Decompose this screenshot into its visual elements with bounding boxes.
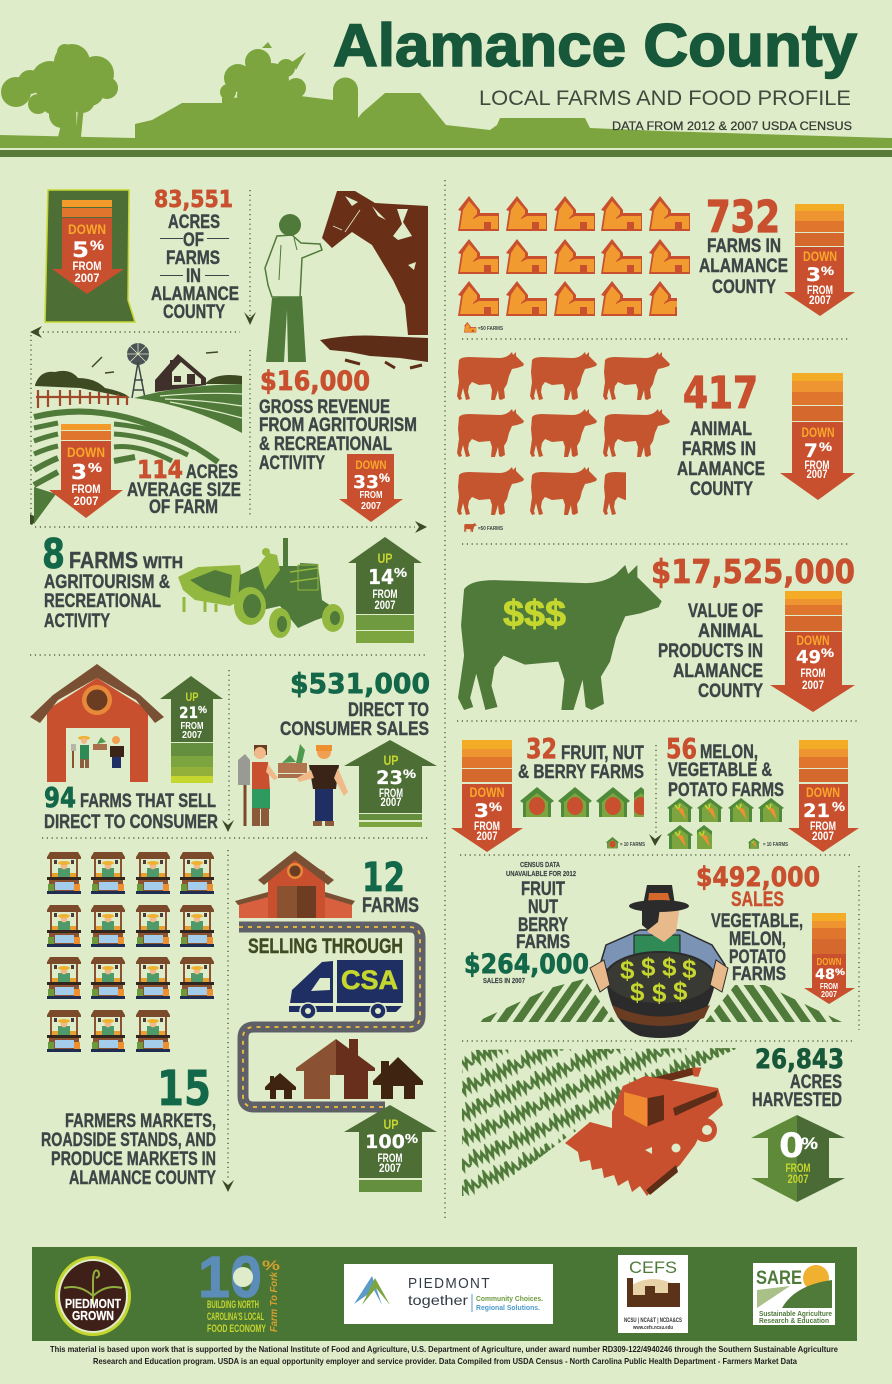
down arrow 3%: [451, 740, 523, 852]
panel: vegetable sales: VEGETABLE,: [711, 911, 803, 932]
logo: 10% campaign: [198, 1245, 281, 1335]
panel: 417 animal farms: [457, 352, 855, 532]
panel: value of animal products: [458, 552, 855, 712]
logo: Piedmont Together: together: [408, 1292, 468, 1308]
panel: direct to consumer sales: DIRECT TO: [348, 700, 429, 721]
down arrow 49%: 49: [796, 647, 821, 668]
down arrow 3%: 2007: [74, 496, 98, 508]
label: & BERRY FARMS: [518, 762, 644, 783]
average size label: [127, 455, 241, 518]
down arrow 7%: [780, 373, 855, 500]
logo: CEFS: CEFS: [629, 1258, 677, 1277]
up arrow 23%: FROM: [379, 788, 403, 800]
markets label: FARMERS MARKETS,: [65, 1111, 216, 1132]
legend: strawberry equals 10 farms: [606, 837, 646, 848]
panel: direct to consumer sales: CONSUMER SALES: [280, 719, 429, 740]
up arrow 14%: %: [394, 565, 407, 580]
icon: farmer and customer with produce crate: [238, 744, 348, 826]
up arrow 23%: %: [403, 767, 416, 781]
panel: vegetable sales: [696, 862, 855, 1004]
panel: fruit sales: CENSUS DATA: [520, 862, 560, 869]
label: ACRES: [790, 1072, 842, 1093]
legend: barn equals 50 farms: [464, 322, 504, 332]
logo: 10% campaign: BUILDING NORTH: [207, 1299, 259, 1311]
panel: farmers markets: [41, 852, 216, 1189]
logo: SARE: SARE: [756, 1268, 802, 1289]
panel: direct to consumer sales: [238, 667, 437, 827]
down arrow 3%: [49, 424, 123, 518]
down arrow 3%: 2007: [809, 295, 831, 307]
markets label: ROADSIDE STANDS, AND: [41, 1130, 216, 1151]
label: HARVESTED: [752, 1090, 842, 1111]
label: COUNTY: [690, 479, 753, 500]
panel: fruit sales: FARMS: [516, 932, 570, 953]
logo: 10% campaign: %: [262, 1257, 281, 1273]
panel: gross revenue from agritourism: GROSS REVENUE: [259, 397, 390, 418]
carrot house icons: [667, 798, 784, 849]
down arrow 48%: FROM: [820, 981, 838, 991]
dotted flow lines and arrowheads: [30, 180, 859, 1218]
label: VALUE OF: [688, 601, 763, 622]
up arrow 100%: 100: [365, 1131, 405, 1153]
data source line: DATA FROM 2012 & 2007 USDA CENSUS: [612, 119, 852, 133]
acres label: OF: [183, 230, 204, 251]
logo: Piedmont Grown: [55, 1256, 131, 1336]
logo: 10% campaign: Farm To Fork: [269, 1272, 280, 1332]
double arrow 0%: %: [801, 1134, 818, 1153]
legend: cow equals 50 farms: =50 FARMS: [478, 526, 504, 532]
up arrow 23%: 23: [376, 767, 403, 789]
label: [518, 732, 644, 783]
up arrow 14%: UP: [378, 550, 392, 566]
farmer: [600, 885, 725, 972]
logo: 10% campaign: CAROLINA'S LOCAL: [207, 1311, 264, 1323]
double arrow 0%: 2007: [788, 1174, 808, 1186]
logo: Piedmont Together: PIEDMONT: [408, 1275, 491, 1292]
up arrow 21%: 2007: [182, 730, 202, 741]
up arrow 100%: FROM: [378, 1153, 402, 1165]
panel: fruit sales: [464, 862, 589, 985]
acres label: COUNTY: [163, 302, 225, 323]
label: ALAMANCE: [673, 661, 763, 682]
label: FARMS IN: [682, 439, 756, 460]
down arrow 21%: [788, 740, 859, 852]
barn icon grid: [458, 196, 690, 316]
down arrow 33%: 2007: [361, 501, 381, 512]
label: FRUIT, NUT: [561, 743, 644, 764]
panel: CSA farms: FARMS: [362, 894, 419, 917]
panel: vegetable sales: FARMS: [732, 964, 786, 985]
up arrow 23%: 2007: [380, 797, 402, 809]
label: 32: [526, 732, 557, 765]
skyline: trees and farm silhouette: [0, 42, 892, 157]
down arrow 5%: 5: [72, 238, 89, 262]
up arrow 14%: 14: [368, 565, 394, 589]
label: [699, 192, 788, 298]
average size label: OF FARM: [149, 497, 218, 518]
down arrow 48%: [804, 913, 855, 1004]
panel: farms with agritourism: [42, 530, 422, 643]
panel: fruit sales: SALES IN 2007: [483, 978, 525, 985]
down arrow 48%: DOWN: [816, 957, 842, 968]
down arrow 33%: 33: [353, 472, 379, 493]
panel: CSA farms: SELLING THROUGH: [248, 935, 403, 958]
up arrow 23%: UP: [384, 752, 398, 768]
down arrow 48%: 2007: [821, 989, 837, 999]
bowl of money: $: [620, 955, 635, 985]
down arrow 21%: DOWN: [806, 784, 840, 800]
down arrow 5%: %: [90, 237, 105, 253]
panel: gross revenue from agritourism: FROM AGRITOURISM: [259, 415, 417, 436]
subtitle: LOCAL FARMS AND FOOD PROFILE: [479, 87, 851, 110]
down arrow 49%: [770, 591, 855, 712]
label: 56: [666, 732, 697, 765]
icon: CSA truck: [289, 960, 403, 1019]
panel: fruit sales: $264,000: [464, 949, 589, 980]
up arrow 100%: [344, 1105, 437, 1192]
label: 94: [44, 781, 76, 814]
icon: houses: [265, 1039, 423, 1099]
down arrow 3%: DOWN: [470, 784, 504, 800]
label: [677, 368, 765, 500]
acres figure: 83,551: [154, 187, 233, 213]
icon: large green cow with dollar signs: $$$: [503, 593, 566, 634]
icon: barn: [235, 851, 355, 918]
down arrow 49%: %: [821, 646, 834, 660]
panel: gross revenue from agritourism: [259, 366, 417, 522]
up arrow 14%: FROM: [372, 589, 398, 601]
panel: farms that sell direct to consumer: [30, 664, 223, 833]
panel: melon vegetable potato farms: [666, 732, 859, 852]
up arrow 100%: %: [405, 1131, 418, 1146]
label: MELON,: [700, 742, 758, 763]
logo: Piedmont Together: Community Choices.: [476, 1294, 543, 1303]
up arrow 23%: [344, 740, 437, 827]
down arrow 21%: FROM: [810, 821, 836, 833]
logo: 10% campaign: 10: [198, 1245, 262, 1310]
down arrow 33%: [339, 454, 403, 522]
down arrow 7%: 7: [804, 440, 818, 462]
down arrow 49%: DOWN: [796, 632, 830, 648]
up arrow 100%: UP: [384, 1116, 398, 1132]
markets label: 15: [157, 1061, 211, 1117]
acres label: ACRES: [168, 212, 220, 233]
average size label: 114: [137, 455, 183, 484]
average size label: AVERAGE SIZE: [127, 480, 241, 501]
down arrow 3%: [784, 204, 855, 316]
funding disclaimer text: Research and Education program. USDA is an equal opportunity employer and service provider. Data Compiled from USDA Census - North Carolina Public Health Department - Farmers Market Data: [93, 1356, 797, 1366]
market stall grid: [47, 852, 214, 1052]
panel: vegetable sales: $492,000: [696, 862, 820, 893]
down arrow 3%: 3: [806, 264, 821, 286]
up arrow 14%: 2007: [374, 600, 396, 612]
logo: 10% campaign: FOOD ECONOMY: [207, 1323, 266, 1335]
road: [239, 927, 420, 1107]
down arrow 3%: DOWN: [803, 248, 837, 264]
label: [658, 601, 763, 702]
down arrow 3%: DOWN: [67, 444, 105, 460]
down arrow 5%: 2007: [74, 273, 100, 285]
down arrow 7%: 2007: [806, 469, 828, 481]
panel: gross revenue from agritourism: ACTIVITY: [259, 453, 325, 474]
panel: vegetable sales: MELON,: [729, 929, 786, 950]
down arrow 48%: %: [835, 967, 845, 977]
down arrow 3%: FROM: [807, 285, 833, 297]
down arrow 33%: FROM: [360, 490, 382, 501]
legend: strawberry equals 10 farms: = 10 FARMS: [620, 842, 646, 848]
panel: fruit sales: BERRY: [518, 915, 568, 936]
label: 26,843: [755, 1044, 844, 1075]
icon: CSA truck: CSA: [341, 965, 398, 995]
panel: CSA farms: [235, 851, 437, 1192]
panel: farms with agritourism: AGRITOURISM &: [44, 572, 170, 593]
up arrow 100%: 2007: [379, 1163, 401, 1175]
logo: CEFS: www.cefs.ncsu.edu: [632, 1325, 673, 1331]
down arrow 3%: %: [489, 800, 502, 814]
down arrow 3%: FROM: [474, 821, 500, 833]
bowl of money: $: [662, 952, 677, 982]
panel: fruit sales: NUT: [528, 897, 558, 918]
panel: farms with agritourism: FARMS: [69, 547, 138, 573]
acres label: FARMS: [166, 248, 220, 269]
panel: CSA farms: 12: [362, 855, 405, 901]
panel: acres harvested: [462, 1044, 845, 1202]
panel: direct to consumer sales: $531,000: [290, 667, 430, 700]
acres label: IN: [186, 266, 201, 287]
logo: SARE: [753, 1263, 835, 1325]
illustration: farmer holding bowl of money: [476, 885, 842, 1038]
down arrow 3%: 3: [71, 460, 87, 484]
down arrow 3%: %: [821, 264, 834, 278]
bowl of money: $: [641, 952, 656, 982]
legend: barn equals 50 farms: =50 FARMS: [478, 326, 504, 332]
markets label: ALAMANCE COUNTY: [69, 1168, 216, 1189]
up arrow 21%: UP: [186, 690, 198, 704]
down arrow 5%: DOWN: [68, 221, 106, 237]
illustration: farmer petting cow: [265, 191, 428, 368]
panel: 732 farms: [458, 192, 855, 332]
markets label: PRODUCE MARKETS IN: [51, 1149, 216, 1170]
legend: cow equals 50 farms: [464, 523, 504, 532]
panel: acres of farms: [45, 187, 239, 323]
down arrow 21%: 2007: [812, 831, 834, 843]
logo: Piedmont Together: Regional Solutions.: [476, 1303, 540, 1312]
label: COUNTY: [698, 681, 763, 702]
label: FARMS IN: [707, 236, 781, 257]
cow icon grid: [457, 352, 670, 515]
panel: vegetable sales: SALES: [731, 888, 784, 911]
logo: CEFS: [618, 1255, 688, 1333]
label: DIRECT TO CONSUMER: [44, 812, 218, 833]
down arrow 7%: FROM: [804, 460, 830, 472]
label: VEGETABLE &: [668, 760, 772, 781]
legend: carrot equals 10 farms: = 10 FARMS: [763, 842, 789, 848]
down arrow 3%: FROM: [72, 484, 100, 496]
label: POTATO FARMS: [668, 780, 784, 801]
panel: farms with agritourism: ACTIVITY: [44, 611, 110, 632]
icon: cow: [320, 191, 428, 368]
county map shape: [45, 190, 135, 322]
icon: large green cow with dollar signs: [458, 565, 662, 710]
down arrow 7%: DOWN: [802, 424, 834, 440]
panel: fruit sales: UNAVAILABLE FOR 2012: [506, 871, 576, 878]
panel: farms with agritourism: 8: [42, 530, 65, 578]
panel: farms with agritourism: RECREATIONAL: [44, 591, 161, 612]
bowl of money: $: [682, 954, 697, 984]
average size label: ACRES: [186, 462, 238, 483]
down arrow 21%: 21: [803, 800, 830, 822]
down arrow 5%: FROM: [72, 261, 102, 273]
up arrow 14%: [348, 537, 422, 643]
acres label: [151, 212, 239, 323]
logo: Piedmont Together: [344, 1264, 553, 1324]
panel: fruit nut berry farms: [451, 732, 658, 852]
down arrow 5%: [52, 200, 124, 294]
acres label: ALAMANCE: [151, 284, 239, 305]
label: 417: [683, 368, 758, 419]
down arrow 49%: 2007: [802, 680, 824, 692]
illustration: farm landscape: [34, 343, 242, 524]
label: COUNTY: [712, 277, 776, 298]
label: [666, 732, 784, 801]
label: FARMS THAT SELL: [80, 791, 216, 812]
label: 732: [706, 192, 780, 243]
double arrow 0%: 0: [779, 1126, 804, 1166]
logo: Piedmont Grown: PIEDMONT: [65, 1296, 121, 1311]
bowl of money: $: [673, 976, 688, 1006]
label: ANIMAL: [690, 419, 752, 440]
logo: SARE: Research & Education: [759, 1318, 829, 1325]
label: [752, 1044, 844, 1111]
panel: partner logos footer: [32, 1245, 857, 1341]
panel: value of animal products: $17,525,000: [651, 552, 855, 591]
panel: vegetable sales: POTATO: [729, 947, 786, 968]
icon: farmer: [265, 213, 322, 362]
up arrow 21%: [160, 676, 223, 783]
label: [44, 781, 218, 833]
panel: gross revenue from agritourism: & RECREATIONAL: [259, 434, 392, 455]
double arrow 0%: [751, 1115, 845, 1202]
title: Alamance County: [333, 12, 858, 79]
label: PRODUCTS IN: [658, 641, 763, 662]
panel: farms with agritourism: WITH: [143, 553, 183, 572]
down arrow 33%: DOWN: [356, 458, 386, 472]
down arrow 3%: %: [88, 460, 103, 475]
down arrow 3%: 2007: [476, 831, 498, 843]
bowl of money: [590, 952, 728, 1038]
logo: SARE: Sustainable Agriculture: [759, 1311, 832, 1318]
bowl of money: $: [630, 977, 645, 1007]
label: ALAMANCE: [699, 256, 788, 277]
up arrow 21%: 21: [179, 703, 198, 722]
icon: tractor: [178, 538, 344, 638]
panel: fruit sales: FRUIT: [521, 879, 565, 900]
legend: carrot equals 10 farms: [748, 838, 789, 849]
icon: red barn with farmers: [30, 664, 164, 782]
strawberry house icons: [520, 787, 658, 817]
panel: gross revenue from agritourism: $16,000: [260, 366, 370, 397]
hills: [476, 979, 615, 1022]
down arrow 48%: 48: [815, 967, 835, 983]
down arrow 49%: FROM: [800, 668, 826, 680]
logo: Piedmont Grown: GROWN: [72, 1308, 114, 1323]
down arrow 21%: %: [832, 799, 845, 814]
bowl of money: $: [652, 978, 667, 1008]
label: ALAMANCE: [677, 459, 765, 480]
down arrow 33%: %: [379, 471, 390, 485]
funding disclaimer text: [50, 1344, 838, 1366]
icon: combine harvester: [565, 1067, 723, 1196]
double arrow 0%: FROM: [786, 1163, 810, 1175]
up arrow 21%: FROM: [180, 721, 204, 732]
down arrow 3%: 3: [474, 800, 489, 822]
up arrow 21%: %: [198, 705, 207, 716]
markets label: [41, 1061, 216, 1189]
down arrow 7%: %: [819, 440, 832, 454]
logo: CEFS: NCSU | NCA&T | NCDA&CS: [624, 1318, 682, 1324]
panel: average farm size: [34, 343, 242, 524]
label: ANIMAL: [698, 621, 763, 642]
wheat rows: [462, 1047, 740, 1197]
